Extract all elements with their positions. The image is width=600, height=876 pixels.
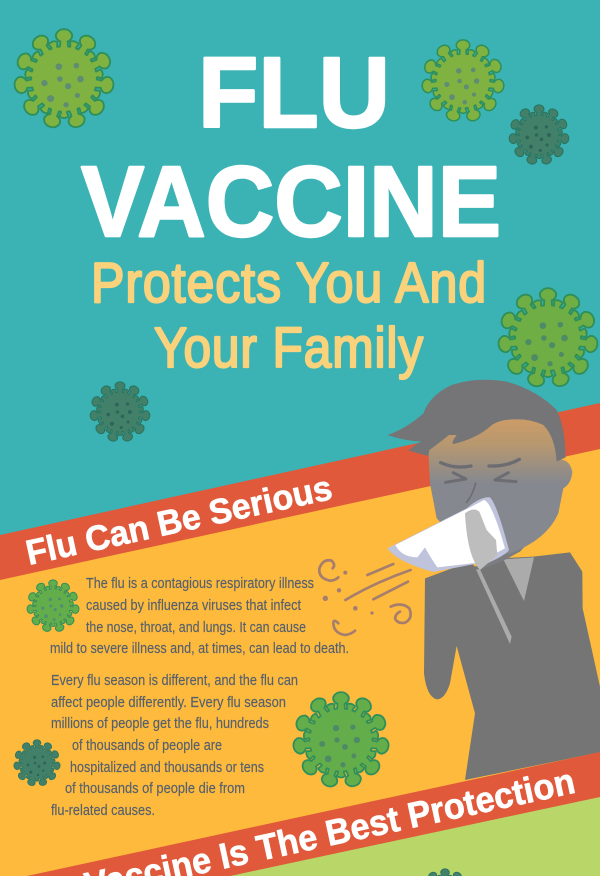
text block: flu description (50, 576, 349, 657)
heading: flu can be serious: Flu Can Be Serious (22, 468, 336, 573)
shirt collar and lapel (476, 557, 534, 644)
figure: sneezing man (387, 380, 600, 780)
hair (387, 380, 566, 462)
text block: flu description: The flu is a contagious respiratory illness (86, 576, 314, 592)
icon: large virus top left (15, 30, 113, 128)
text block: flu season impact: of thousands of people are (72, 738, 222, 754)
banner: vaccine band (27, 752, 600, 876)
icon: dark virus beside second paragraph (14, 740, 60, 786)
icon: virus beside first paragraph (27, 580, 79, 632)
hand fold (465, 510, 497, 570)
subtitle: protects you and your family (91, 251, 487, 380)
panel: yellow section (0, 445, 600, 876)
jacket (424, 552, 600, 780)
neck (480, 517, 553, 570)
icon: sneeze droplets and wind (319, 560, 411, 635)
subtitle: protects you and your family: Protects You And (91, 251, 487, 315)
title: flu vaccine (81, 37, 501, 258)
text block: flu description: mild to severe illness and, at times, can lead to death. (50, 641, 349, 657)
text block: flu season impact: of thousands of people die from (65, 781, 245, 797)
icon: dark virus below subtitle (90, 383, 150, 442)
tissue (387, 497, 509, 572)
text block: flu season impact: flu-related causes. (51, 803, 155, 819)
icon: dark virus at bottom edge (419, 869, 471, 876)
subtitle: protects you and your family: Your Family (154, 316, 424, 380)
icon: dark virus top right (509, 106, 569, 165)
text block: flu description: the nose, throat, and lungs. It can cause (86, 620, 306, 636)
face and ear (428, 413, 572, 557)
icon: large virus beside second paragraph (293, 693, 389, 787)
text block: flu season impact: Every flu season is different, and the flu can (51, 673, 298, 689)
icon: virus top right (422, 41, 504, 121)
text block: flu description: caused by influenza viruses that infect (86, 598, 301, 614)
title: flu vaccine: FLU (198, 37, 390, 149)
text block: flu season impact (51, 673, 298, 819)
banner: flu can be serious band (0, 403, 600, 580)
text block: flu season impact: affect people differently. Every flu season (51, 695, 286, 711)
icon: virus right of subtitle (499, 289, 597, 387)
text block: flu season impact: millions of people get the flu, hundreds (51, 716, 269, 732)
closed eyes, brows and nose (441, 459, 519, 502)
text block: flu season impact: hospitalized and thousands or tens (70, 760, 264, 776)
panel: green section (230, 790, 600, 876)
title: flu vaccine: VACCINE (81, 146, 501, 258)
